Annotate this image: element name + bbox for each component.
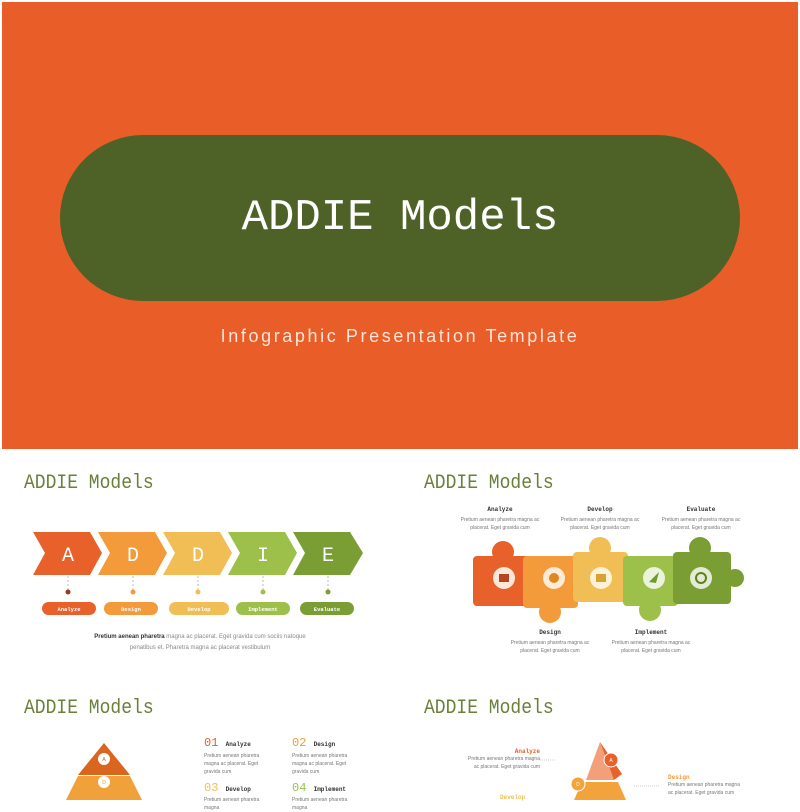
puzzle pieces [473, 537, 744, 623]
panel: pyramid list: 03 Develop [204, 781, 251, 795]
chevron row: Implement [248, 606, 278, 613]
label: Evaluate: Pretium aenean pharetra magna ac placerat. Eget gravida cum [662, 517, 740, 531]
heading: ADDIE Models [424, 472, 554, 495]
3d pyramid [540, 742, 659, 800]
chevron row: Design [121, 606, 141, 613]
label: Implement: Implement [635, 629, 667, 636]
label: Design: Pretium aenean pharetra magna ac placerat. Eget gravida cum [511, 640, 589, 654]
label: Develop: Develop [500, 794, 525, 801]
label: Design: Pretium aenean pharetra magna ac placerat. Eget gravida cum [668, 782, 740, 796]
subtitle: Infographic Presentation Template [221, 326, 579, 346]
label: Implement [612, 629, 690, 654]
chevron row: D [127, 545, 139, 568]
3d pyramid: A [609, 758, 613, 764]
pyramid [66, 743, 142, 800]
label: Analyze [468, 748, 540, 770]
label: Design: Design [539, 629, 561, 636]
heading: ADDIE Models [424, 697, 554, 720]
label: Develop: Pretium aenean pharetra magna ac placerat. Eget gravida cum [561, 517, 639, 531]
chevron row: D [192, 545, 204, 568]
label: Develop [561, 506, 640, 531]
heading: ADDIE Models [24, 472, 154, 495]
chevron row: A [62, 545, 74, 568]
panel: pyramid list: 02 Design [292, 736, 335, 750]
panel: pyramid list: 04 Implement [292, 781, 346, 795]
panel: puzzle [424, 472, 744, 654]
chevron row: Analyze [57, 606, 81, 613]
text: Pretium aenean pharetra magna [204, 797, 259, 811]
panel: 3D pyramid [424, 697, 740, 801]
pyramid: A [102, 757, 106, 763]
text: Pretium aenean pharetra magna [292, 797, 347, 811]
chevron row: E [322, 545, 334, 568]
label: Implement: Pretium aenean pharetra magna ac placerat. Eget gravida cum [612, 640, 690, 654]
label: Develop: Develop [587, 506, 613, 513]
panel: pyramid list: Pretium aenean pharetra magna ac placerat. Eget gravida cum [292, 753, 347, 775]
panel: pyramid list [24, 697, 348, 811]
label: Analyze: Pretium aenean pharetra magna ac placerat. Eget gravida cum [468, 756, 540, 770]
label: Analyze: Analyze [515, 748, 540, 755]
description text: Pretium aenean pharetra magna ac placerat. Eget gravida cum sociis natoque penatibus et. Pharetra magna ac placerat vestibulum [94, 634, 306, 651]
chevron row [33, 532, 363, 615]
heading: ADDIE Models [24, 697, 154, 720]
title pill: ADDIE Models [242, 193, 558, 243]
label: Design: Design [668, 774, 690, 781]
chevron row: Develop [187, 606, 211, 613]
panel: pyramid list: Pretium aenean pharetra magna ac placerat. Eget gravida cum [204, 753, 259, 775]
label: Design [511, 629, 590, 654]
chevron row: I [257, 545, 269, 568]
label: Design [668, 774, 740, 796]
pyramid: D [102, 780, 106, 786]
title pill [60, 135, 740, 301]
chevron row: Evaluate [314, 606, 341, 613]
hero banner [2, 2, 798, 449]
list items: 01 Analyze [204, 736, 251, 750]
label: Analyze [461, 506, 540, 531]
label: Evaluate [662, 506, 740, 531]
label: Analyze: Analyze [487, 506, 513, 513]
label: Evaluate: Evaluate [687, 506, 715, 513]
3d pyramid: D [576, 782, 580, 788]
panel: chevrons [24, 472, 363, 651]
label: Analyze: Pretium aenean pharetra magna ac placerat. Eget gravida cum [461, 517, 539, 531]
